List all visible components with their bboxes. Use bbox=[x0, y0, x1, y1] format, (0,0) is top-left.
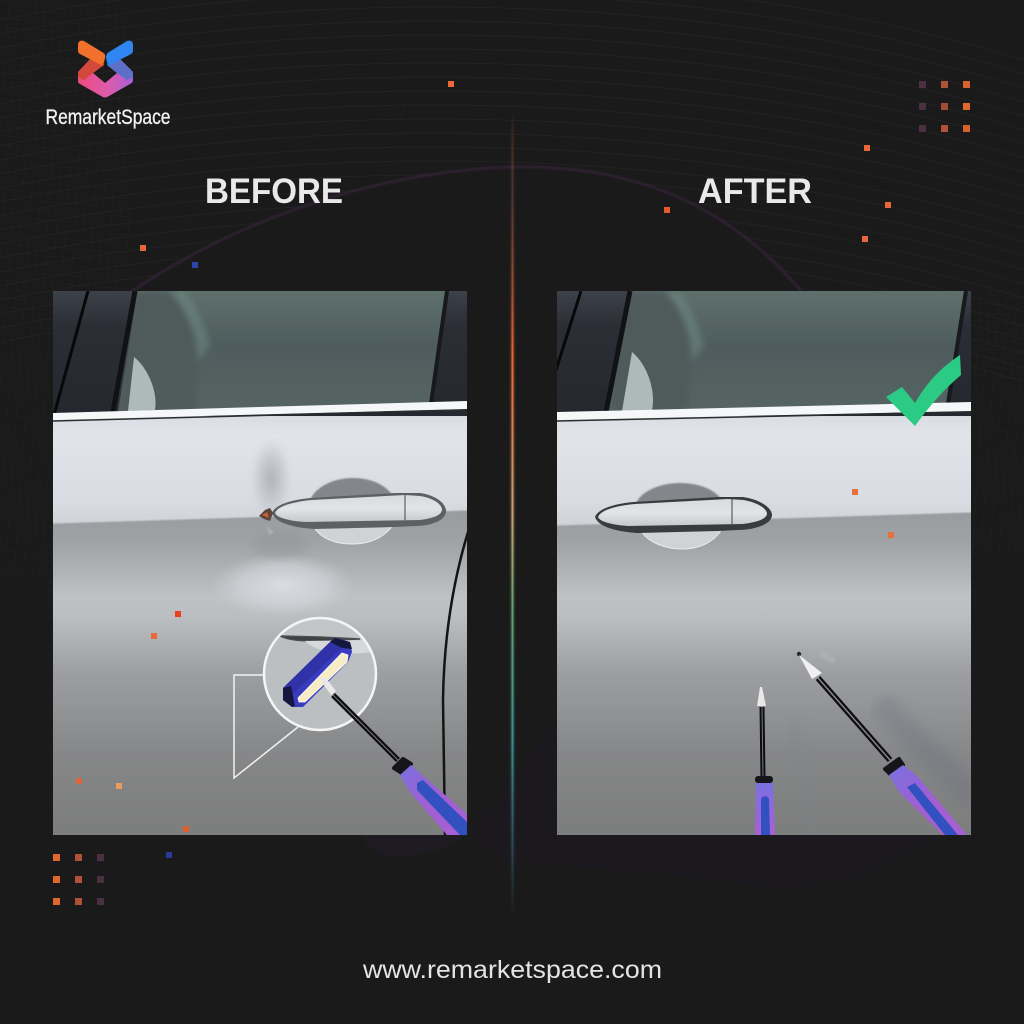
window glass bbox=[556, 291, 971, 416]
door upper body bbox=[40, 415, 480, 524]
icon: paint damage bbox=[259, 508, 274, 535]
dome edge glow bbox=[125, 167, 805, 296]
screwdriver left bbox=[755, 687, 775, 835]
heading: before: BEFORE bbox=[205, 172, 343, 211]
dent shading bbox=[225, 446, 341, 610]
magnifier lens bbox=[264, 618, 376, 730]
lower purple wave bbox=[470, 724, 971, 887]
icon: green check mark bbox=[886, 355, 961, 426]
footer url: www.remarketspace.com bbox=[362, 956, 662, 984]
door handle bbox=[595, 483, 772, 549]
logo icon bbox=[78, 41, 133, 98]
orange markers bbox=[76, 611, 189, 832]
heading: after: AFTER bbox=[698, 172, 812, 211]
door lower body bbox=[53, 505, 467, 835]
window trim bbox=[53, 401, 467, 420]
screwdriver right bbox=[797, 652, 967, 835]
door lower body bbox=[557, 505, 971, 835]
screwdriver bbox=[319, 678, 468, 835]
mesh right edge bbox=[971, 290, 1024, 640]
center divider light bbox=[510, 110, 515, 920]
dark dome bbox=[125, 167, 805, 296]
logo wordmark: RemarketSpace bbox=[46, 105, 170, 129]
dot grid top right bbox=[919, 81, 970, 132]
panel: before photo bbox=[40, 291, 480, 835]
window glass bbox=[53, 291, 467, 416]
orange markers bbox=[852, 489, 894, 538]
door upper body bbox=[544, 415, 984, 526]
window trim bbox=[557, 402, 971, 420]
scattered particles bbox=[140, 81, 891, 858]
mesh curved lines bbox=[0, 0, 1024, 382]
door handle bbox=[272, 478, 446, 544]
smudge marks bbox=[829, 660, 930, 750]
panel: after photo bbox=[544, 291, 984, 835]
door seam bbox=[443, 532, 468, 835]
mesh left edge bbox=[0, 0, 130, 680]
dot grid bottom left bbox=[53, 854, 104, 905]
pry tool head bbox=[283, 638, 352, 707]
callout bracket bbox=[234, 675, 298, 778]
